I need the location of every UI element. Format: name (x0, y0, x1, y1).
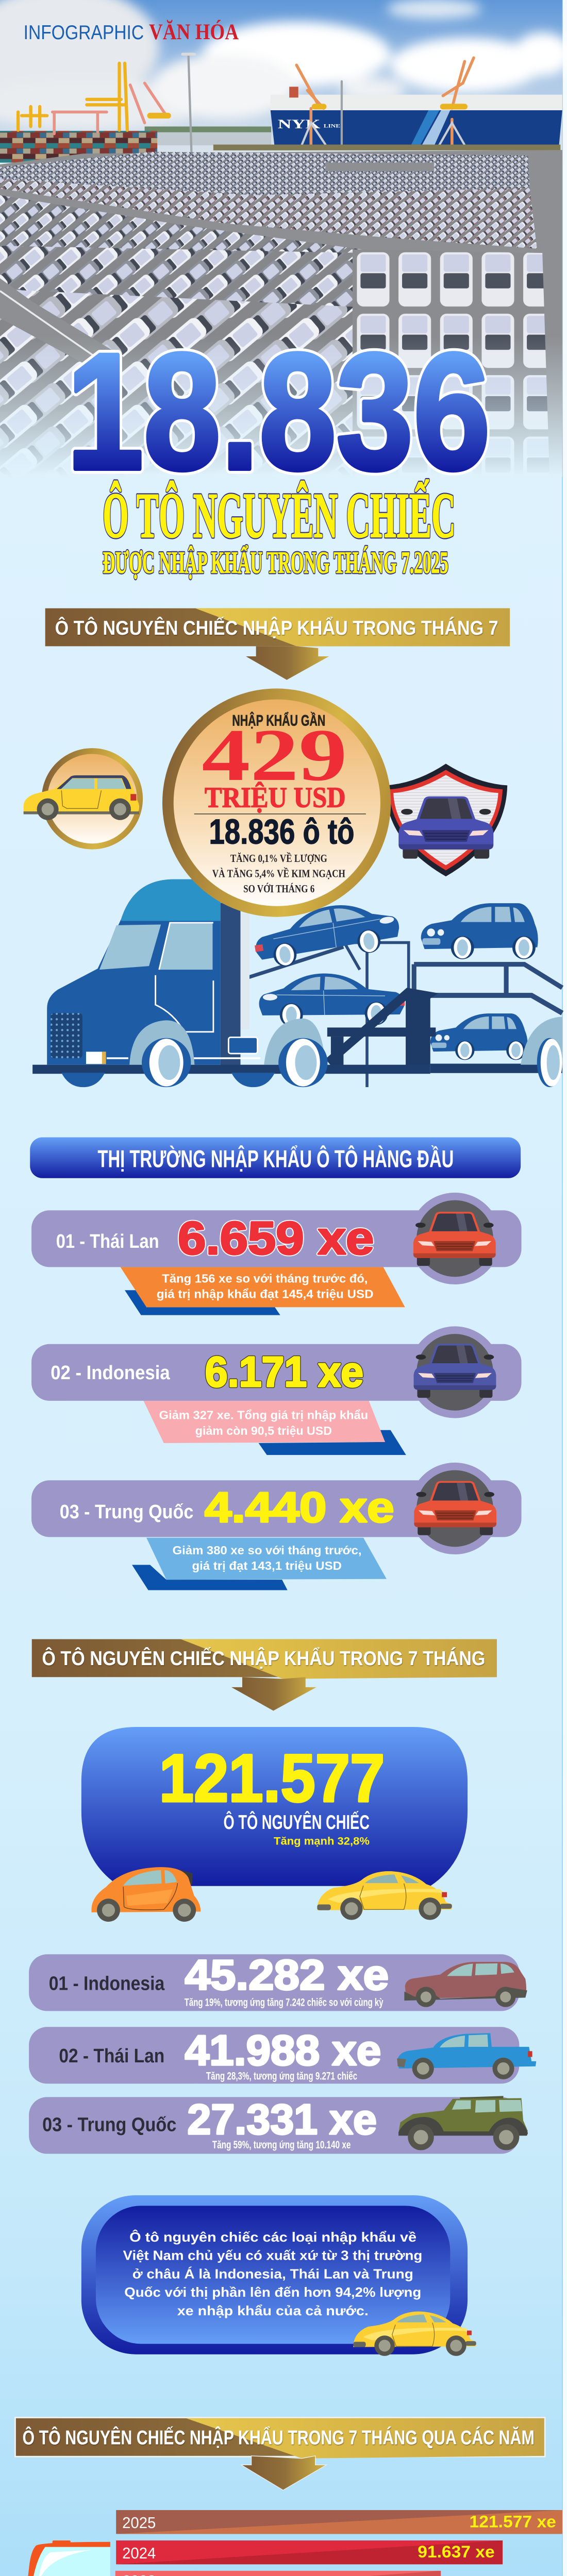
market 02 Indonesia: giảm còn 90,5 triệu USD (195, 1424, 332, 1437)
brand logo top: INFOGRAPHIC (24, 21, 144, 44)
callout: market share: ở châu Á là Indonesia, Thái Lan và Trung (132, 2266, 413, 2281)
quay clutter (213, 145, 560, 150)
market 03 China: 4.440 xe (205, 1483, 394, 1531)
total panel: Ô TÔ NGUYÊN CHIẾC (224, 1810, 370, 1834)
subtitle (103, 479, 456, 580)
bar 2025: 121.577 xe (470, 2513, 556, 2531)
market 01 Thailand: Tăng 156 xe so với tháng trước đó, (162, 1272, 368, 1285)
bar 2024: 91.637 xe (418, 2543, 495, 2561)
title number 18.836: 18.836 (66, 319, 490, 504)
illustration: red car front (3, 2540, 110, 2576)
main circle: import value: SO VỚI THÁNG 6 (243, 883, 314, 895)
bar 2023 (115, 2571, 441, 2576)
market 03 China: 03 - Trung Quốc (60, 1501, 193, 1523)
market 02 Thailand: 02 - Thái Lan (59, 2045, 164, 2067)
title number 18.836: 18.836 (66, 319, 490, 504)
callout: market share: Ô tô nguyên chiếc các loại nhập khẩu về (129, 2229, 416, 2245)
market 03 China: giá trị đạt 143,1 triệu USD (192, 1559, 342, 1572)
total panel (81, 1727, 468, 1922)
bar 2025 (116, 2510, 562, 2534)
main circle: import value: TĂNG 0,1% VỀ LƯỢNG (230, 852, 327, 865)
callout: market share: Việt Nam chủ yếu có xuất xứ từ 3 thị trường (123, 2249, 422, 2263)
bar chart: imports by year (115, 2510, 562, 2576)
callout: market share: Quốc với thị phần lên đến hơn 94,2% lượng (124, 2285, 421, 2300)
brand logo top: VĂN HÓA (149, 19, 239, 44)
market 02 Indonesia: 6.171 xe (205, 1348, 363, 1396)
market 01 Thailand (31, 1193, 522, 1315)
market 03 China (29, 2095, 528, 2154)
market 02 Indonesia: 6.171 xe (205, 1348, 363, 1396)
section 2: top import markets (30, 1138, 522, 1590)
illustration: car carrier truck (32, 879, 562, 1087)
main circle: import value: TRIỆU USD (205, 781, 346, 814)
main circle: import value: 429 (202, 714, 347, 796)
market 01 Indonesia (29, 1951, 527, 2011)
market 03 China: 03 - Trung Quốc (42, 2114, 176, 2136)
cranes (18, 54, 474, 170)
hero photo: port with imported cars: LINE (324, 124, 341, 129)
market 03 China: Tăng 59%, tương ứng tăng 10.140 xe (212, 2139, 351, 2151)
market 01 Thailand: 6.659 xe (178, 1213, 374, 1264)
bar 2024 (116, 2540, 503, 2564)
total panel: 121.577 (159, 1740, 385, 1816)
market 01 Thailand: 6.659 xe (178, 1213, 374, 1264)
section heading banner: Ô TÔ NGUYÊN CHIẾC NHẬP KHẨU TRONG THÁNG 7 (55, 616, 498, 639)
market 01 Indonesia: Tăng 19%, tương ứng tăng 7.242 chiếc so với cùng kỳ (185, 1997, 383, 2009)
market 02 Indonesia: 02 - Indonesia (51, 1362, 171, 1384)
section heading banner (32, 1639, 497, 1710)
market 01 Thailand: giá trị nhập khẩu đạt 145,4 triệu USD (157, 1287, 374, 1301)
containers (0, 131, 157, 163)
icon: car in shield (385, 764, 507, 876)
market 01 Indonesia: 01 - Indonesia (49, 1973, 165, 1995)
hero photo: port with imported cars: NYK (278, 117, 321, 131)
section 3: seven months imports (29, 1639, 536, 2154)
icon: yellow car in circle (24, 748, 143, 850)
market 02 Thailand: 41.988 xe (185, 2026, 381, 2074)
callout: market share: xe nhập khẩu của cả nước. (177, 2304, 369, 2318)
total panel: Tăng mạnh 32,8% (274, 1836, 370, 1848)
section heading banner (15, 2417, 545, 2490)
market 01 Indonesia: 45.282 xe (185, 1951, 389, 1998)
market 02 Indonesia (31, 1326, 522, 1455)
section heading pill (30, 1138, 521, 1178)
section heading banner: Ô TÔ NGUYÊN CHIẾC NHẬP KHẨU TRONG 7 THÁNG (42, 1647, 485, 1670)
market 02 Thailand (29, 2026, 536, 2083)
main circle: import value: 18.836 ô tô (209, 812, 354, 851)
hero photo: port with imported cars (0, 0, 567, 477)
near lot (0, 195, 362, 285)
market 02 Thailand: Tăng 28,3%, tương ứng tăng 9.271 chiếc (206, 2071, 357, 2082)
market 01 Thailand: 01 - Thái Lan (56, 1231, 159, 1252)
section 1: July imports (24, 608, 562, 1087)
main circle: import value (162, 688, 391, 917)
market 02 Indonesia: Giảm 327 xe. Tổng giá trị nhập khẩu (159, 1409, 368, 1422)
market 03 China: Giảm 380 xe so với tháng trước, (173, 1544, 361, 1557)
brand logo top (24, 19, 239, 44)
main circle: import value: NHẬP KHẨU GẦN (232, 712, 325, 730)
market 03 China: 27.331 xe (187, 2095, 377, 2143)
ship (271, 95, 562, 111)
section 4: note and yearly chart (3, 2195, 562, 2576)
bar 2024: 2024 (122, 2544, 156, 2562)
far lot (0, 152, 530, 195)
section heading banner (45, 608, 510, 680)
ground (0, 150, 562, 477)
bar 2025: 2025 (122, 2514, 156, 2532)
main circle: import value: VÀ TĂNG 5,4% VỀ KIM NGẠCH (212, 868, 345, 880)
callout: market share (81, 2195, 476, 2356)
market 03 China (31, 1463, 522, 1590)
